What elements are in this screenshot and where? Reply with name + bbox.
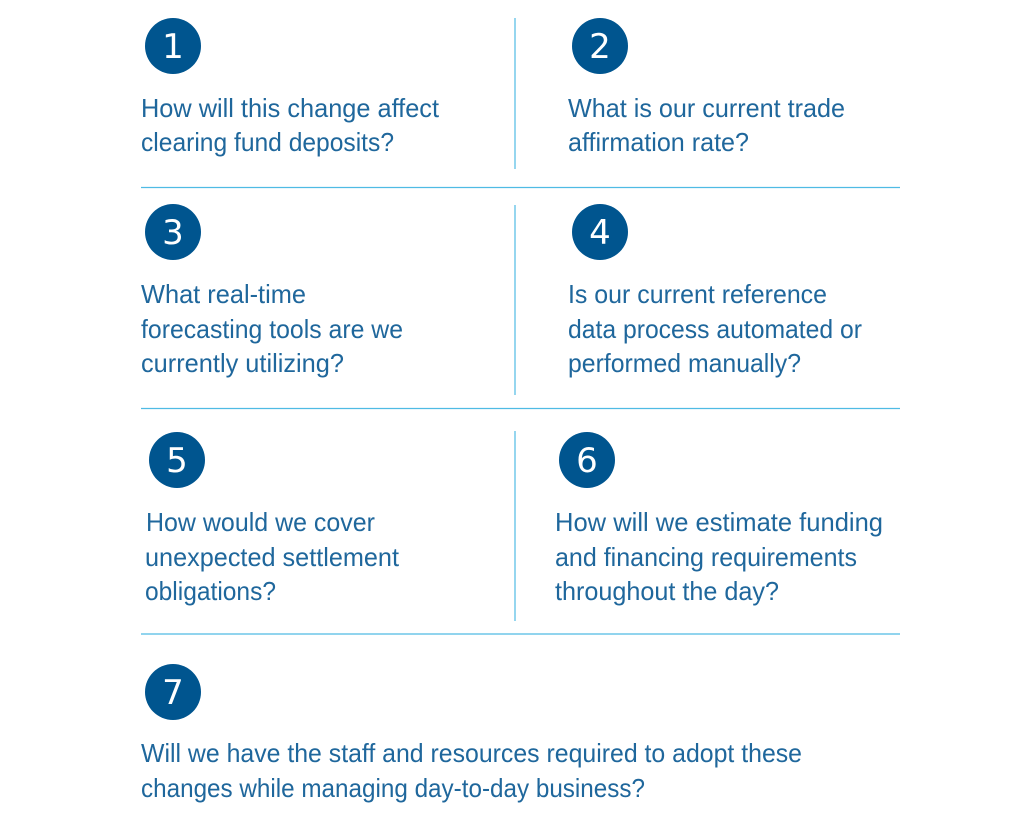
question 3 text: forecasting tools are we [141,314,403,344]
question 5 text: obligations? [145,576,276,606]
question 1 [141,18,440,157]
question 4 text: performed manually? [568,348,801,378]
question 5 text: How would we cover [146,507,375,537]
question 4 text [568,279,862,378]
question 6 text: and financing requirements [555,542,857,572]
question 3 text: What real-time [141,279,306,309]
question 7 text: Will we have the staff and resources required to adopt these [141,738,802,768]
question 1 text: clearing fund deposits? [141,127,394,157]
number badge 6: 6 [576,441,598,481]
question 2 text [568,93,845,157]
question 1 text [141,93,440,157]
number badge 1 [145,18,201,74]
question 6 text: How will we estimate funding [555,507,883,537]
number badge 7 [145,664,201,720]
number badge 7: 7 [162,673,184,713]
number badge 4 [572,204,628,260]
question 4 [568,204,862,378]
number badge 3: 3 [162,213,184,253]
number badge 5 [149,432,205,488]
number badge 5: 5 [166,441,188,481]
question 6 text [555,507,883,606]
question 3 text: currently utilizing? [141,348,344,378]
question 3 text [141,279,403,378]
number badge 6 [559,432,615,488]
number badge 3 [145,204,201,260]
number badge 1: 1 [162,27,184,67]
question 7 text: changes while managing day-to-day business? [141,773,645,803]
number badge 2 [572,18,628,74]
question 7 text [141,738,802,803]
question 4 text: data process automated or [568,314,862,344]
question 1 text: How will this change affect [141,93,440,123]
question 2 [568,18,845,157]
question 6 [555,432,883,606]
question 7 [141,664,802,803]
question 6 text: throughout the day? [555,576,779,606]
number badge 4: 4 [589,213,611,253]
number badge 2: 2 [589,27,611,67]
question 2 text: What is our current trade [568,93,845,123]
question 5 text: unexpected settlement [145,542,400,572]
question 4 text: Is our current reference [568,279,827,309]
question 3 [141,204,403,378]
question 2 text: affirmation rate? [568,127,749,157]
question 5 [145,432,400,606]
question 5 text [145,507,400,606]
